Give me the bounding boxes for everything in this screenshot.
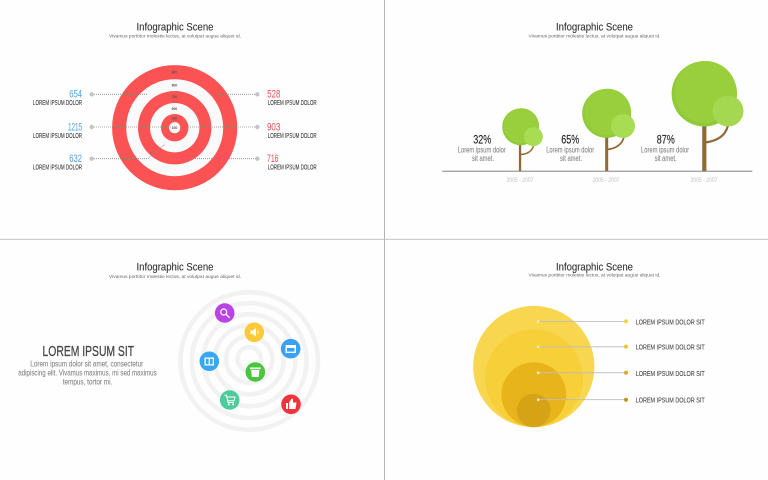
callout: level 1: LOREM IPSUM DOLOR SIT	[636, 317, 705, 326]
panel: target chart	[33, 22, 317, 190]
stat: 32%: sit amet.	[472, 154, 494, 163]
stat: 87%	[641, 132, 689, 163]
subtitle: circles panel: Vivamus porttitor molestie lectus, at volutpat augue aliquet id.	[528, 272, 660, 277]
leader line: 903	[188, 125, 260, 129]
stat: 903	[267, 122, 317, 140]
icon: browser window	[281, 339, 301, 359]
icon: picture frame	[200, 352, 219, 371]
ring value labels: 100	[172, 126, 177, 130]
body text: adipiscing elit. Vivamus maximus, mi sed maximus	[18, 368, 157, 377]
stat: 87%: sit amet.	[655, 154, 677, 163]
target rings	[112, 65, 237, 190]
callout: level 2: LOREM IPSUM DOLOR SIT	[636, 342, 705, 352]
stat: 654: LOREM IPSUM DOLOR	[33, 98, 82, 107]
stat: 65%: sit amet.	[560, 154, 582, 163]
tree: small	[502, 108, 543, 171]
year labels: 2005 - 2007	[506, 177, 534, 184]
stat: 716: LOREM IPSUM DOLOR	[268, 163, 317, 172]
leader line: 716	[175, 156, 260, 161]
leader line: 632	[90, 144, 165, 161]
stat: 903: 903	[267, 122, 280, 134]
stat: 632: LOREM IPSUM DOLOR	[33, 163, 82, 172]
body text: Lorem ipsum dolor sit amet, consectetur	[30, 360, 144, 368]
icon: search	[215, 303, 234, 323]
ring value labels: 300	[172, 116, 177, 120]
stat: 87%: 87%	[657, 132, 675, 146]
year labels: 2005 - 2007	[592, 177, 620, 184]
leader line: 1215	[90, 125, 174, 129]
panel: nested circles	[473, 262, 705, 427]
icon: shopping cart	[220, 390, 240, 410]
panel: growing trees	[442, 22, 752, 184]
tree: medium	[582, 89, 635, 171]
ring value labels: 700	[172, 95, 177, 99]
title: trees panel: Infographic Scene	[556, 22, 633, 34]
stat: 632: 632	[69, 153, 82, 165]
panel: spiral icons	[18, 262, 318, 430]
title: circles panel: Infographic Scene	[556, 262, 633, 274]
stat: 632	[33, 153, 82, 172]
callout: level 3	[537, 369, 705, 378]
callout: level 4	[537, 396, 705, 404]
stat: 32%	[458, 132, 506, 163]
callout: level 1	[537, 317, 705, 326]
stat: 654: 654	[69, 89, 82, 101]
callout: level 3: LOREM IPSUM DOLOR SIT	[636, 369, 705, 378]
stat: 65%: Lorem ipsum dolor	[546, 145, 594, 154]
year labels: 2005 - 2007	[690, 177, 718, 184]
nested yellow circles	[473, 306, 594, 427]
ring value labels: 800	[172, 70, 177, 74]
ground line	[442, 171, 752, 172]
stat: 65%: 65%	[561, 132, 580, 146]
subtitle: trees panel: Vivamus porttitor molestie lectus, at volutpat augue aliquet id.	[528, 34, 660, 39]
leader line: 654	[90, 92, 148, 97]
heading: LOREM IPSUM SIT	[43, 344, 134, 360]
spiral rings	[180, 292, 318, 430]
leader line: 528	[218, 92, 260, 97]
subtitle: spiral panel: Vivamus porttitor molestie lectus, at volutpat augue aliquet id.	[109, 274, 241, 279]
title: spiral panel: Infographic Scene	[136, 262, 214, 274]
title: target panel: Infographic Scene	[136, 22, 214, 34]
stat: 528: 528	[267, 89, 280, 101]
stat: 32%: Lorem ipsum dolor	[458, 145, 506, 154]
stat: 528: LOREM IPSUM DOLOR	[268, 98, 317, 107]
callout: level 4: LOREM IPSUM DOLOR SIT	[636, 396, 705, 404]
stat: 903: LOREM IPSUM DOLOR	[268, 131, 317, 140]
stat: 654	[33, 89, 82, 107]
body text	[18, 360, 157, 386]
stat: 1215: 1215	[68, 122, 82, 134]
stat: 87%: Lorem ipsum dolor	[641, 145, 689, 154]
icon: thumbs up	[281, 394, 301, 414]
ring value labels: 800	[172, 83, 177, 87]
year labels	[506, 177, 718, 184]
icon: trash can	[246, 362, 265, 382]
subtitle: target panel: Vivamus porttitor molestie lectus, at volutpat augue aliquet id.	[109, 34, 241, 39]
ring value labels: 600	[172, 107, 177, 111]
stat: 32%: 32%	[473, 132, 492, 146]
callout: level 2	[537, 342, 705, 352]
stat: 1215: LOREM IPSUM DOLOR	[33, 131, 82, 140]
stat: 528	[267, 89, 317, 107]
tree: large	[672, 61, 744, 171]
body text: tempus, tortor mi.	[63, 377, 112, 386]
ring value labels	[172, 70, 177, 130]
stat: 716: 716	[267, 153, 278, 165]
stat: 1215	[33, 122, 82, 140]
icon: speaker	[244, 322, 264, 342]
stat: 716	[267, 153, 317, 172]
stat: 65%	[546, 132, 594, 163]
